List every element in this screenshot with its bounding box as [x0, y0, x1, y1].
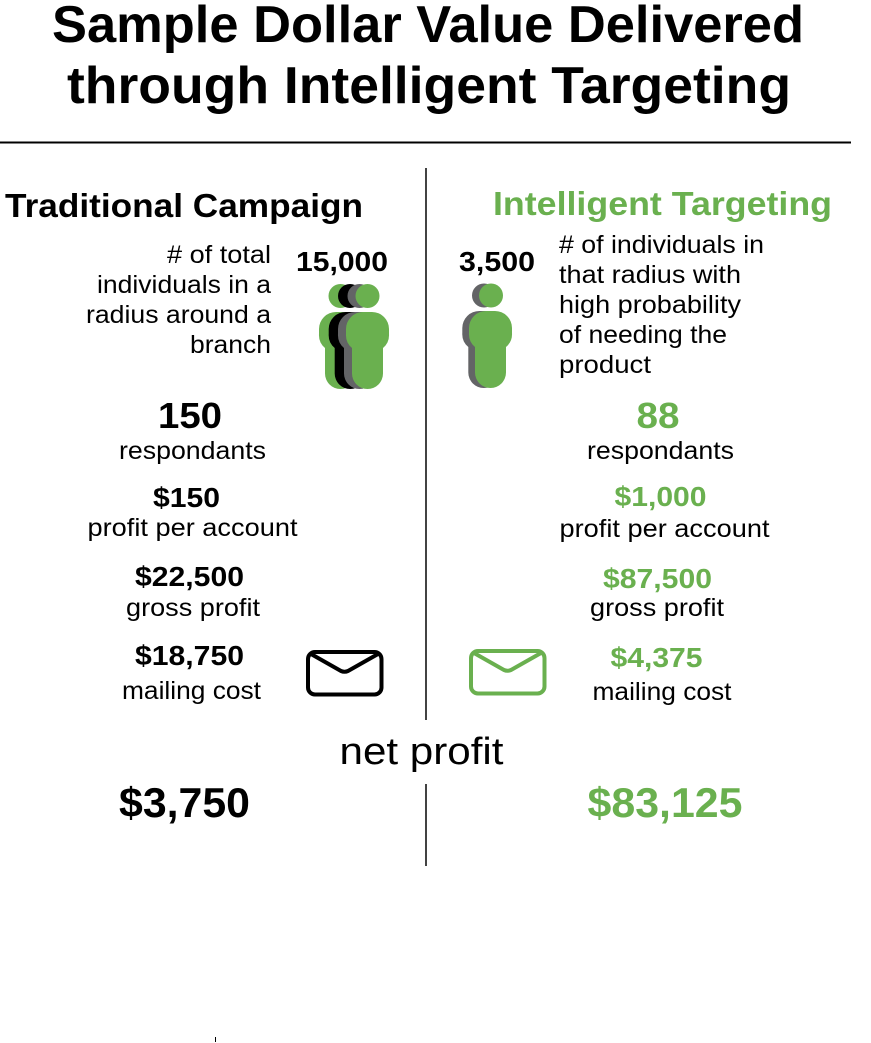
stat: mailing cost: $4,375 [610, 642, 702, 673]
result: traditional net profit: $3,750 [119, 779, 250, 826]
stat: gross profit: gross profit [126, 594, 260, 622]
stat: gross profit: gross profit [590, 594, 724, 622]
text block: individuals with high probability: product [559, 351, 651, 379]
text block: total individuals: # of total [167, 241, 271, 269]
stat: respondants [119, 395, 266, 465]
label: net profit: net profit [340, 731, 504, 773]
stat: mailing cost [122, 640, 261, 705]
panel: intelligent targeting [459, 185, 832, 826]
text block: total individuals [86, 241, 271, 359]
stat: profit per account [88, 482, 298, 542]
result: intelligent targeting net profit: $83,125 [588, 779, 742, 826]
text block: total individuals: radius around a [86, 301, 271, 329]
stat: respondants: 150 [158, 395, 222, 436]
stat: mailing cost [592, 642, 732, 706]
stat: respondants [587, 395, 734, 465]
stat: respondants: 88 [636, 395, 680, 436]
stat: gross profit: $87,500 [603, 563, 712, 594]
text block: individuals with high probability [559, 231, 764, 379]
text block: total individuals: branch [190, 331, 271, 359]
stat: respondants: respondants [587, 437, 734, 465]
stat: gross profit: $22,500 [135, 561, 244, 592]
stat: profit per account: $150 [153, 482, 220, 513]
text block: individuals with high probability: # of individuals in [559, 231, 764, 259]
stat: mailing cost: mailing cost [122, 677, 261, 705]
heading: intelligent targeting: Intelligent Targeting [493, 185, 832, 222]
heading: traditional campaign: Traditional Campaign [5, 187, 363, 224]
stat: gross profit [590, 563, 724, 622]
stat: respondants: respondants [119, 437, 266, 465]
stat: mailing cost: mailing cost [592, 678, 732, 706]
text block: individuals with high probability: that radius with [559, 261, 741, 289]
stat: profit per account: $1,000 [614, 481, 706, 512]
stat: profit per account [560, 481, 770, 543]
stat: gross profit [126, 561, 260, 622]
title: through Intelligent Targeting [67, 57, 791, 115]
icon: envelope [471, 651, 544, 694]
text block: individuals with high probability: high probability [559, 291, 742, 319]
panel: traditional campaign [5, 187, 389, 826]
number: 15,000: 15,000 [296, 246, 388, 277]
icon: people group [319, 284, 389, 389]
stat: profit per account: profit per account [560, 515, 770, 543]
number: 3,500: 3,500 [459, 246, 535, 277]
title [52, 0, 804, 115]
stat: profit per account: profit per account [88, 514, 298, 542]
icon: envelope [308, 652, 382, 694]
text block: individuals with high probability: of needing the [559, 321, 727, 349]
stat: mailing cost: $18,750 [135, 640, 244, 671]
icon: people pair [462, 284, 512, 388]
text block: total individuals: individuals in a [97, 271, 271, 299]
